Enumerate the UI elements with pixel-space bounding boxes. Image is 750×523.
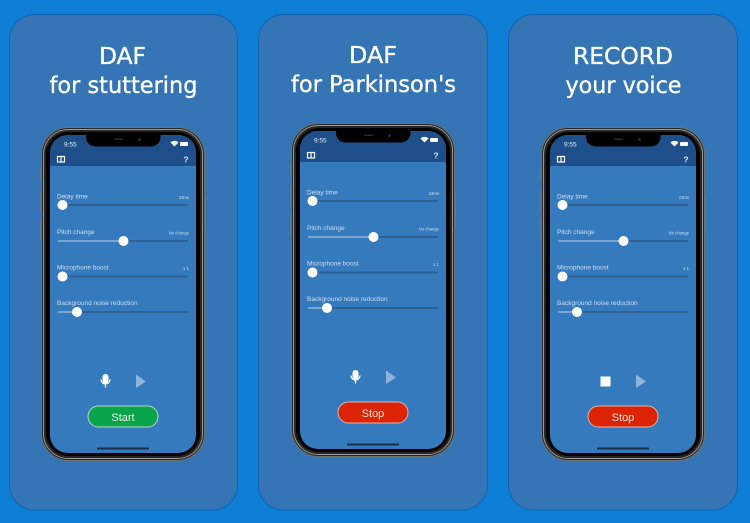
icon: microphone [101,374,110,388]
phone mockup: record [540,128,706,460]
panel: DAF for Parkinson's [258,14,488,510]
home indicator [347,444,399,446]
slider: delay time: 23ms [679,195,689,200]
panel: RECORD your voice [508,14,738,510]
icon: stop square [600,376,610,386]
slider: pitch change: No change [419,226,440,232]
slider: pitch change [557,229,690,246]
slider: pitch change: Pitch change [557,229,595,236]
icon: help: ? [183,154,189,164]
status bar: 9:55 [564,142,577,148]
icon: play [636,374,646,388]
slider: delay time: Delay time [557,194,588,200]
icon: help: ? [433,150,439,160]
phone mockup: Parkinson's [290,124,456,456]
screen [50,135,196,453]
slider: microphone boost [57,264,190,282]
icon: help: ? [683,154,689,164]
slider: microphone boost: Microphone boost [57,264,109,272]
icon: play [136,374,146,388]
slider: background noise reduction [557,300,688,317]
slider: pitch change: No change [669,230,690,236]
status bar: 9:55 [314,138,327,144]
status bar: 9:55 [64,142,77,148]
slider: pitch change: No change [169,230,190,236]
title: DAF for stuttering [50,42,198,99]
home indicator [97,448,149,450]
slider: microphone boost: x 1 [183,266,190,271]
status bar [314,137,438,144]
slider: pitch change [307,225,440,242]
phone mockup: stuttering [40,128,206,460]
slider: pitch change [57,229,190,246]
slider: microphone boost: Microphone boost [307,260,359,268]
slider: delay time: 23ms [179,195,189,200]
icon: book [558,156,564,162]
button: start [88,406,158,427]
slider: microphone boost [557,264,690,282]
button: stop [338,402,408,423]
slider: background noise reduction: Background noise reduction [307,296,388,303]
screen [550,135,696,453]
title: RECORD your voice: your voice [566,71,682,99]
status bar [564,141,688,148]
button: stop: Stop [362,408,384,420]
button: start: Start [111,412,135,424]
home indicator [597,448,649,450]
panel: DAF for stuttering [10,14,238,510]
slider: delay time [307,190,439,206]
slider: delay time [57,194,189,210]
button: stop: Stop [612,412,634,424]
slider: delay time [557,194,689,210]
slider: background noise reduction: Background noise reduction [557,300,638,307]
title: RECORD your voice [566,42,682,99]
title: RECORD your voice: RECORD [573,42,673,70]
slider: background noise reduction [57,300,188,317]
slider: delay time: Delay time [57,194,88,200]
status bar [64,141,188,148]
title: DAF for Parkinson's: DAF [349,41,397,69]
icon: microphone [351,370,360,384]
screen [300,131,446,449]
slider: background noise reduction: Background noise reduction [57,300,138,307]
icon: book [58,156,64,162]
slider: microphone boost: x 1 [683,266,690,271]
title: DAF for stuttering: DAF [99,42,146,70]
slider: pitch change: Pitch change [57,229,95,236]
button: stop [588,406,658,427]
slider: delay time: 23ms [429,191,439,196]
slider: delay time: Delay time [307,190,338,196]
icon: play [386,370,396,384]
slider: microphone boost: Microphone boost [557,264,609,272]
icon: book [308,152,314,158]
title: DAF for stuttering: for stuttering [50,71,198,99]
title: DAF for Parkinson's [291,41,456,98]
title: DAF for Parkinson's: for Parkinson's [291,70,456,98]
slider: pitch change: Pitch change [307,225,345,232]
slider: background noise reduction [307,296,438,313]
slider: microphone boost: x 1 [433,262,440,267]
slider: microphone boost [307,260,440,278]
